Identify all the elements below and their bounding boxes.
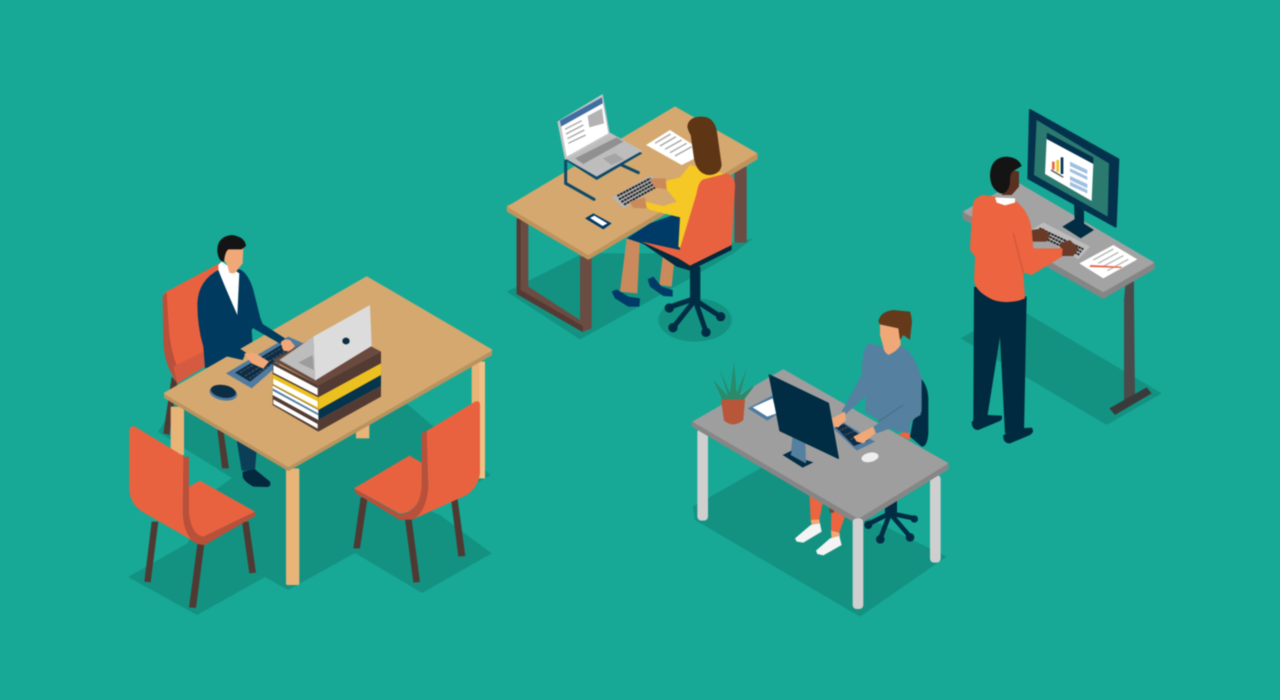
scene: man at standing desk with monitor: [961, 110, 1162, 443]
desk top: [508, 108, 756, 258]
woman's legs and shoes: [795, 430, 910, 555]
woman's arms: [842, 343, 922, 433]
front left chair: [129, 426, 256, 608]
man's head and hair: [217, 235, 246, 273]
desk top: [964, 183, 1153, 297]
woman's head and ponytail: [878, 310, 912, 355]
chair base shadow: [658, 298, 732, 342]
scene: woman at grey desk with monitor and plant: [693, 310, 947, 617]
table top: [165, 277, 491, 470]
laptop: [279, 305, 372, 381]
mouse: [208, 383, 238, 403]
hands: [832, 412, 875, 443]
man's arms, shirt and hands: [206, 262, 295, 369]
woman's skirt: [627, 210, 688, 260]
woman's hair: [687, 117, 722, 175]
man's head: [990, 157, 1022, 195]
office chair base: [864, 498, 918, 544]
monitor with chart on screen: [1028, 110, 1118, 227]
man's trousers and shoes: [972, 287, 1033, 443]
clipboard: [748, 395, 778, 421]
man's chair: [163, 263, 229, 468]
collar: [995, 197, 1015, 205]
desk top: [693, 371, 947, 523]
keyboard: [226, 337, 303, 388]
laptop stand: [566, 161, 638, 199]
woman's legs and shoes: [612, 237, 674, 307]
chair back: [678, 173, 735, 266]
paper on desk: [646, 130, 695, 165]
man's hands: [1032, 228, 1078, 256]
plant in pot: [713, 362, 755, 424]
keyboard: [612, 175, 659, 208]
man's torso: [197, 269, 260, 368]
chair with casters: [665, 267, 725, 337]
phone: [585, 213, 612, 229]
man's sweater: [970, 195, 1063, 302]
front right chair: [353, 401, 480, 583]
paper and pencil: [1079, 245, 1137, 278]
desk legs: [697, 428, 941, 563]
desk column and foot: [1109, 282, 1152, 415]
woman's torso: [865, 343, 922, 433]
sweater fold: [1013, 233, 1023, 273]
keyboard: [833, 422, 875, 451]
desk legs: [517, 167, 747, 332]
laptop: [557, 94, 642, 180]
floor shadow: [507, 238, 753, 339]
keyboard: [1032, 222, 1090, 259]
scene: man at wooden table with two chairs: [128, 235, 492, 615]
floor shadow: [693, 467, 947, 617]
stack of books: [273, 327, 381, 432]
floor shadow: [128, 387, 492, 615]
floor shadow: [961, 313, 1162, 425]
front desk leg: [853, 518, 863, 609]
mouse: [861, 451, 879, 464]
table legs: [171, 362, 485, 585]
man's legs and shoe: [237, 440, 270, 487]
woman's yellow top and arms: [629, 165, 723, 250]
chair seat and back: [640, 242, 732, 271]
monitor stand: [1062, 202, 1094, 238]
chair back: [910, 378, 928, 447]
monitor: [769, 375, 838, 468]
scene: woman at desk with laptop on stand: [507, 94, 756, 342]
